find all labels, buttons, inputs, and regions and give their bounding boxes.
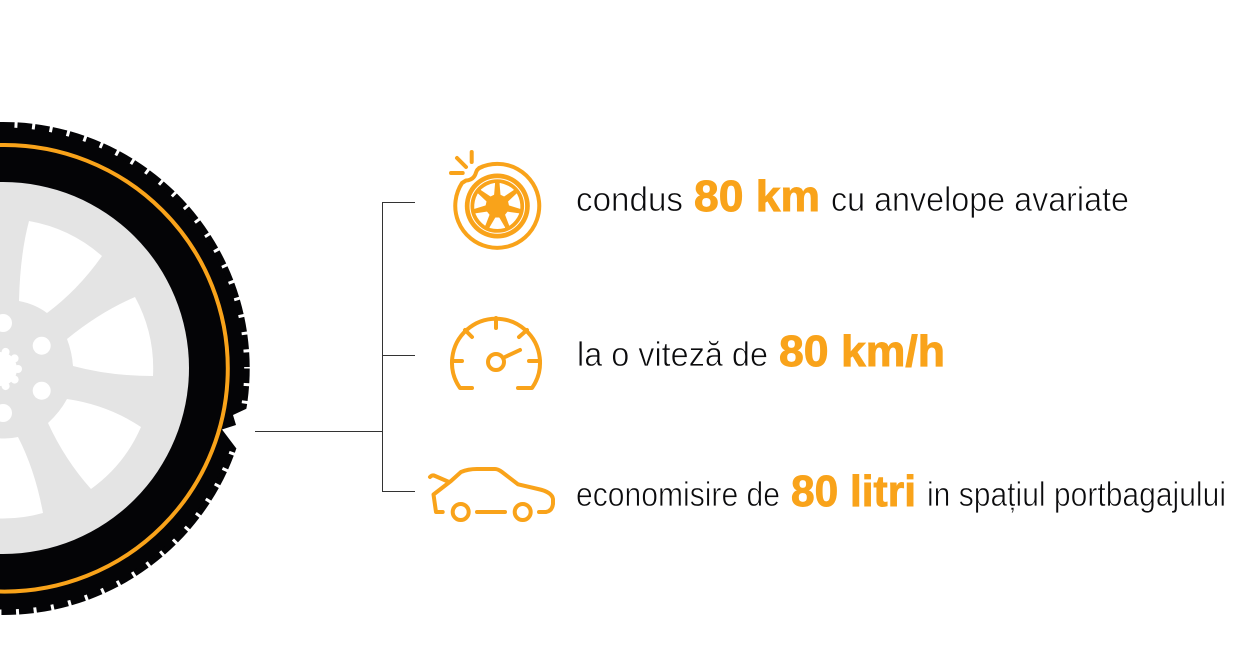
trunk lid [430, 475, 449, 482]
icon: damaged wheel [451, 152, 539, 248]
gauge arc [452, 319, 540, 388]
text: speed: la o viteză de [577, 336, 768, 374]
underbody line [477, 510, 505, 514]
rim bolt holes [0, 314, 51, 422]
tire illustration [0, 125, 258, 612]
text: damaged tyres distance [576, 172, 1129, 221]
text: damaged tyres distance: condus [576, 181, 683, 219]
orange rim stripe [0, 145, 228, 592]
text: damaged tyres distance: cu anvelope avariate [831, 181, 1129, 219]
tire damage gash [222, 404, 258, 458]
gauge pivot [488, 354, 504, 370]
rim spoke openings [0, 221, 153, 519]
impact sparks [451, 152, 472, 173]
wheel disc [465, 174, 530, 238]
grey wheel rim [0, 182, 189, 554]
wheel hub [0, 348, 22, 390]
text: damaged tyres distance: 80 km [694, 172, 820, 221]
text: trunk space: 80 litri [791, 467, 916, 516]
car wheels [453, 504, 469, 520]
gauge needle [505, 350, 520, 357]
text: speed [577, 327, 945, 376]
gauge ticks [452, 318, 540, 361]
car body [434, 469, 553, 512]
tire body [0, 128, 244, 610]
icon: car with open trunk [430, 469, 553, 520]
connector lines [255, 202, 415, 492]
icon: speedometer [452, 318, 540, 388]
tire tread [0, 125, 247, 612]
text: trunk space [576, 467, 1226, 516]
text: trunk space: economisire de [576, 476, 780, 514]
wheel outer ring [455, 164, 539, 248]
wheel windows [474, 183, 521, 228]
text: speed: 80 km/h [779, 327, 945, 376]
wheel inner line [470, 179, 525, 233]
